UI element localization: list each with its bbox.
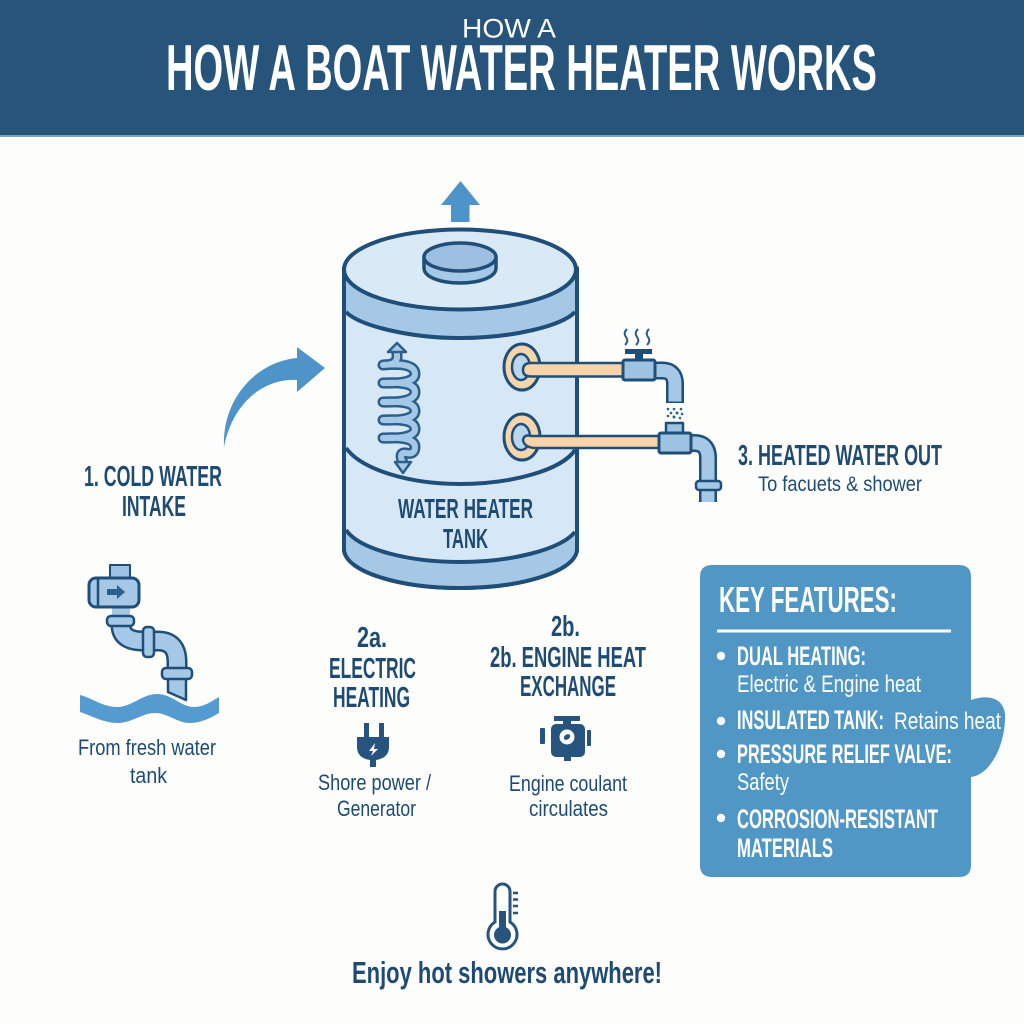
icon: engine <box>540 716 591 761</box>
upper collar <box>107 616 134 626</box>
lower ring inner <box>512 424 530 450</box>
source label: tank <box>130 763 168 788</box>
panel: key features <box>700 565 1005 877</box>
heating coil <box>383 343 415 473</box>
engine caption: circulates <box>529 796 608 821</box>
water droplets <box>667 408 683 419</box>
steam <box>625 329 649 345</box>
T fitting <box>659 433 691 453</box>
step 2b label: 2b. ENGINE HEAT <box>490 642 646 674</box>
valve body <box>89 578 139 607</box>
upper ring inner <box>512 354 530 380</box>
upper elbow <box>653 370 675 403</box>
upper valve body <box>623 360 655 380</box>
water wave <box>80 694 219 723</box>
outlet elbow <box>689 443 708 502</box>
feature: dual heating: DUAL HEATING: <box>737 641 866 671</box>
header banner <box>0 0 1024 137</box>
step 2b label <box>490 611 646 703</box>
engine caption: Engine coulant <box>509 771 627 796</box>
curved inlet arrow <box>224 347 325 447</box>
plug caption <box>318 770 432 821</box>
icon: plug <box>357 723 389 767</box>
tank lower band <box>346 530 575 586</box>
step 2a label: ELECTRIC <box>329 653 416 685</box>
step 3 label: To facuets & shower <box>758 473 922 496</box>
water heater tank <box>344 230 577 588</box>
lower hot pipe and outlet <box>504 414 721 502</box>
eyebrow text: HOW A <box>462 14 556 44</box>
top cap <box>424 243 496 283</box>
valve top cap <box>110 565 130 579</box>
step 2a label: 2a. <box>357 622 387 654</box>
arrow: hot water up <box>441 181 480 222</box>
feature: insulated tank: INSULATED TANK: <box>737 705 884 735</box>
middle collar <box>143 627 154 657</box>
engine caption <box>509 771 627 821</box>
tank body <box>344 268 577 588</box>
feature: corrosion-resistant <box>717 804 938 863</box>
valve divider <box>97 579 99 606</box>
T stub <box>666 423 683 434</box>
lower copper pipe <box>523 436 659 448</box>
lower pipe stub <box>168 678 186 700</box>
upper hot pipe and valve <box>504 329 675 403</box>
outlet collar <box>696 481 721 490</box>
lower collar <box>162 668 192 679</box>
step 2a label: HEATING <box>333 682 410 714</box>
valve handle <box>625 349 652 359</box>
coil bottom arrowhead <box>395 462 411 473</box>
tank top ellipse <box>344 230 576 310</box>
feature: pressure relief valve: Safety <box>737 769 789 796</box>
step 1 label <box>84 461 222 523</box>
feature: pressure relief valve <box>717 739 952 796</box>
step 1 label: INTAKE <box>122 491 186 523</box>
intake pipe icon <box>89 565 192 700</box>
tank upper band <box>346 275 575 338</box>
step 1 label: 1. COLD WATER <box>84 461 222 493</box>
upper ring fitting <box>504 344 540 390</box>
closing tagline: Enjoy hot showers anywhere! <box>352 955 662 990</box>
upper copper pipe <box>523 363 624 376</box>
step 2b label: 2b. <box>551 611 580 643</box>
tank label <box>398 493 533 554</box>
plug caption: Shore power / <box>318 770 432 795</box>
icon: thermometer <box>488 884 518 949</box>
valve neck <box>112 606 130 617</box>
tank label: TANK <box>443 523 488 554</box>
panel heading: KEY FEATURES: <box>719 579 897 620</box>
source label <box>78 735 216 788</box>
coil top arrowhead <box>388 343 406 352</box>
tank label: WATER HEATER <box>398 493 533 524</box>
lower pipe run <box>121 625 177 672</box>
source label: From fresh water <box>78 735 216 760</box>
step 3 label <box>738 440 942 496</box>
panel background <box>700 565 1005 877</box>
feature: corrosion-resistant: MATERIALS <box>737 833 833 863</box>
tank outline strokes <box>344 268 577 588</box>
feature: dual heating: Electric & Engine heat <box>737 671 921 698</box>
step 2a label <box>329 622 416 714</box>
feature: dual heating <box>717 641 921 698</box>
lower ring fitting <box>504 414 540 460</box>
step 2b label: EXCHANGE <box>520 671 616 703</box>
plug caption: Generator <box>337 796 416 821</box>
valve arrow <box>107 585 125 599</box>
